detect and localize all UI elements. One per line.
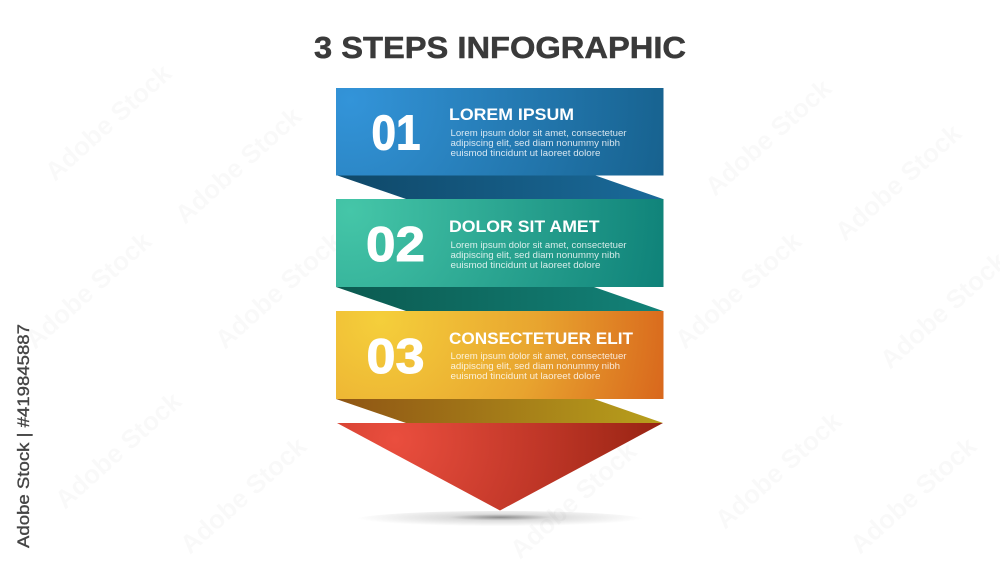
step body 03: Lorem ipsum dolor sit amet, consectetuer	[450, 351, 626, 362]
step body 01: euismod tincidunt ut laoreet dolore	[450, 148, 600, 159]
step body 02: adipiscing elit, sed diam nonummy nibh	[450, 250, 620, 261]
panel: step 01	[336, 88, 664, 176]
arrow shadow	[355, 511, 645, 529]
title: 3 STEPS INFOGRAPHIC	[314, 30, 686, 65]
watermark pattern: Adobe Stock	[709, 405, 848, 534]
fold: green to yellow	[336, 287, 663, 311]
watermark pattern: Adobe Stock	[169, 100, 308, 229]
step body 01	[450, 128, 626, 159]
fold: blue to green	[336, 175, 663, 199]
watermark pattern: Adobe Stock	[669, 225, 808, 354]
step heading 03: CONSECTETUER ELIT	[449, 330, 633, 348]
watermark pattern: Adobe Stock	[209, 225, 348, 354]
arrow: red triangle	[337, 423, 663, 510]
panel: step 03	[336, 311, 664, 399]
watermark pattern: Adobe Stock	[699, 72, 838, 201]
watermark pattern: Adobe Stock	[39, 57, 178, 186]
stock id side text: Adobe Stock | #419845887	[15, 324, 33, 548]
step body 03: adipiscing elit, sed diam nonummy nibh	[450, 361, 620, 372]
watermark pattern: Adobe Stock	[844, 430, 983, 559]
step heading 02: DOLOR SIT AMET	[449, 218, 600, 236]
watermark pattern: Adobe Stock	[829, 117, 968, 246]
fold: yellow to red	[336, 399, 663, 423]
step number 01: 01	[372, 106, 420, 160]
watermark pattern: Adobe Stock	[504, 435, 643, 563]
step body 02: euismod tincidunt ut laoreet dolore	[450, 260, 600, 271]
watermark pattern: Adobe Stock	[49, 385, 188, 514]
step body 02: Lorem ipsum dolor sit amet, consectetuer	[450, 240, 626, 251]
step number 03: 03	[366, 330, 424, 384]
step body 01: adipiscing elit, sed diam nonummy nibh	[450, 138, 620, 149]
watermark pattern: Adobe Stock	[19, 225, 158, 354]
panel: step 02	[336, 199, 664, 287]
step heading 01: LOREM IPSUM	[449, 106, 574, 124]
step number 02: 02	[366, 218, 425, 272]
step body 01: Lorem ipsum dolor sit amet, consectetuer	[450, 128, 626, 139]
step body 03: euismod tincidunt ut laoreet dolore	[450, 371, 600, 382]
step body 03	[450, 351, 626, 382]
step body 02	[450, 240, 626, 271]
watermark pattern: Adobe Stock	[174, 430, 313, 559]
